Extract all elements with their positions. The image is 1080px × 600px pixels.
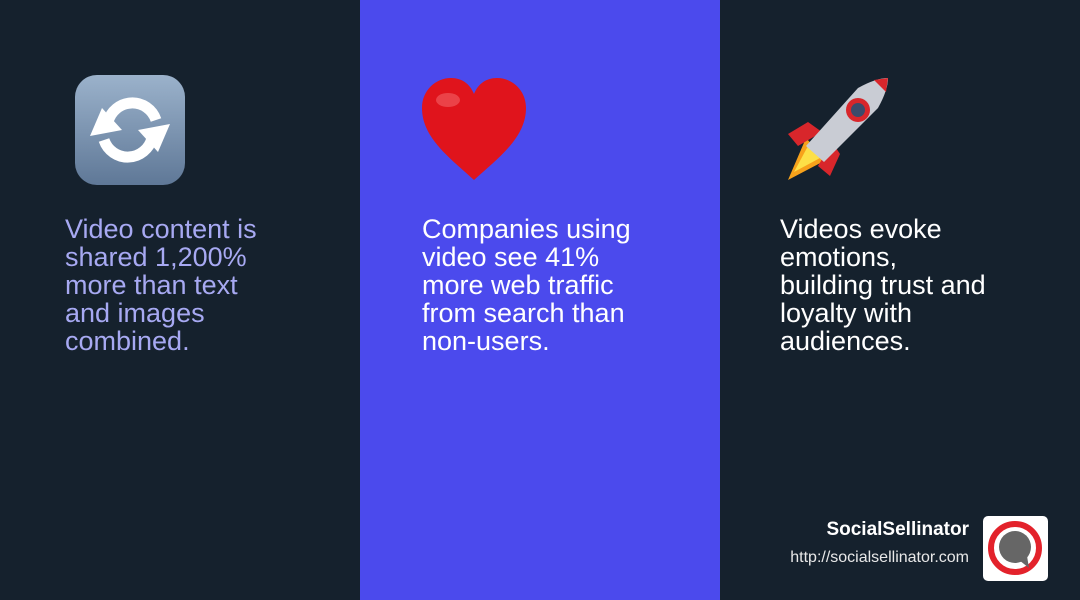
- text: traffic stat: more web traffic: [422, 270, 614, 300]
- logo: [983, 516, 1048, 581]
- brand url: http://socialsellinator.com: [790, 549, 969, 566]
- panel: emotions: [720, 0, 1080, 600]
- text: traffic stat: [422, 214, 631, 356]
- text: emotions stat: Videos evoke: [780, 214, 942, 244]
- text: emotions stat: audiences.: [780, 326, 911, 356]
- text: emotions stat: emotions,: [780, 242, 897, 272]
- text: traffic stat: Companies using: [422, 214, 631, 244]
- text: traffic stat: from search than: [422, 298, 625, 328]
- brand name: SocialSellinator: [826, 519, 969, 540]
- text: traffic stat: non-users.: [422, 326, 550, 356]
- icon: heart: [422, 78, 526, 180]
- text: shared stat: [65, 214, 257, 356]
- panel: traffic: [360, 0, 720, 600]
- text: emotions stat: building trust and: [780, 270, 986, 300]
- text: emotions stat: [780, 214, 986, 356]
- text: shared stat: and images: [65, 298, 205, 328]
- text: shared stat: shared 1,200%: [65, 242, 247, 272]
- icon: repeat arrows: [75, 75, 185, 185]
- brand block: [790, 516, 1048, 581]
- icon: rocket: [788, 78, 888, 180]
- text: emotions stat: loyalty with: [780, 298, 912, 328]
- text: shared stat: more than text: [65, 270, 238, 300]
- panel: shared: [0, 0, 360, 600]
- text: traffic stat: video see 41%: [422, 242, 599, 272]
- text: shared stat: Video content is: [65, 214, 257, 244]
- text: shared stat: combined.: [65, 326, 190, 356]
